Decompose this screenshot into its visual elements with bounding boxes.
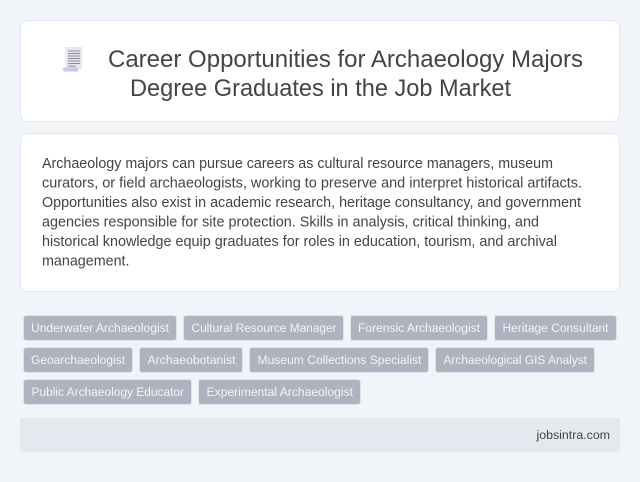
tag: Archaeobotanist [148,353,236,367]
tag [184,316,344,340]
tag: Heritage Consultant [502,321,609,335]
description text: management. [42,254,130,270]
description text [42,156,582,270]
tag: Archaeological GIS Analyst [444,353,588,367]
title [108,46,583,102]
description text: Archaeology majors can pursue careers as cultural resource managers, museum [42,156,553,172]
description text: historical knowledge equip graduates for roles in education, tourism, and archival [42,234,557,250]
tag [140,348,242,372]
tag [198,380,360,404]
tag [494,316,616,340]
tag [24,380,192,404]
tag [250,348,428,372]
tag: Public Archaeology Educator [32,385,184,399]
description text: Opportunities also exist in academic research, heritage consultancy, and government [42,195,581,211]
tag: Underwater Archaeologist [31,321,170,335]
footer [20,418,620,452]
tag [24,348,132,372]
tag: Forensic Archaeologist [358,321,481,335]
footer: jobsintra.com [536,428,610,442]
tags: career roles [24,316,616,404]
description text: agencies responsible for site protection. Skills in analysis, critical thinking, and [42,214,539,230]
tag: Museum Collections Specialist [258,353,422,367]
title: Degree Graduates in the Job Market [130,75,511,102]
tag: Experimental Archaeologist [206,385,354,399]
tag [24,316,176,340]
tag: Geoarchaeologist [31,353,126,367]
panel: header [20,20,620,122]
icon: scroll document [63,47,82,72]
description text: curators, or field archaeologists, working to preserve and interpret historical artifacts. [42,176,582,192]
tag [436,348,594,372]
tag [350,316,488,340]
panel: description [20,134,620,292]
tag: Cultural Resource Manager [192,321,336,335]
title: Career Opportunities for Archaeology Majors [108,46,583,73]
